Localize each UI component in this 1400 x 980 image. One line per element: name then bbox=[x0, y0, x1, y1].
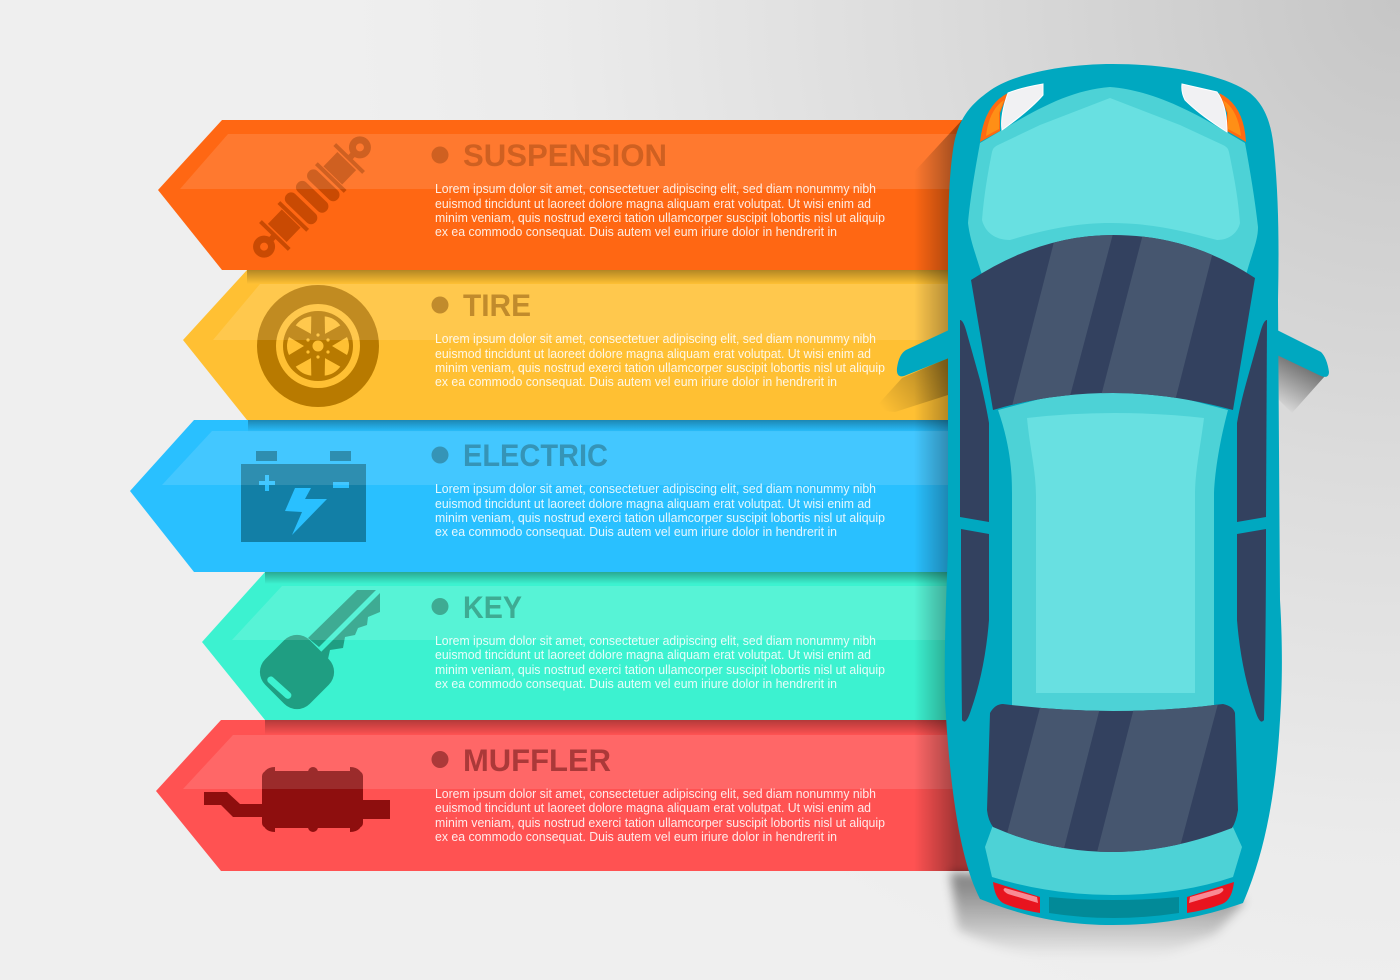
trunk bbox=[985, 825, 1242, 895]
suspension band bbox=[158, 120, 965, 270]
muffler band bbox=[156, 720, 970, 871]
band highlight bbox=[162, 431, 965, 485]
car shadow on ground bbox=[950, 872, 1246, 961]
muffler text: euismod tincidunt ut laoreet dolore magna aliquam erat volutpat. Ut wisi enim ad bbox=[435, 801, 871, 815]
key text: ex ea commodo consequat. Duis autem vel eum iriure dolor in hendrerit in bbox=[435, 677, 837, 691]
rear window bbox=[987, 700, 1238, 860]
side windows right bbox=[1237, 320, 1267, 722]
rear plate panel bbox=[1049, 897, 1179, 918]
car body bbox=[945, 64, 1282, 925]
key band bbox=[202, 572, 965, 720]
roof bbox=[998, 380, 1228, 712]
suspension text: euismod tincidunt ut laoreet dolore magna aliquam erat volutpat. Ut wisi enim ad bbox=[435, 197, 871, 211]
suspension heading: SUSPENSION bbox=[463, 137, 667, 173]
tail light left bbox=[993, 882, 1040, 913]
band highlight bbox=[183, 735, 970, 789]
tire heading: TIRE bbox=[463, 287, 531, 323]
electric text: euismod tincidunt ut laoreet dolore magna aliquam erat volutpat. Ut wisi enim ad bbox=[435, 497, 871, 511]
band highlight bbox=[232, 586, 965, 640]
icon: shock absorber bbox=[242, 126, 382, 268]
electric band bbox=[130, 420, 965, 572]
hood bbox=[968, 87, 1258, 275]
side mirror left bbox=[897, 330, 949, 376]
roof panel bbox=[1027, 413, 1204, 693]
band top shadow bbox=[265, 720, 970, 735]
icon: tire bbox=[257, 285, 379, 407]
key text: minim veniam, quis nostrud exerci tation ullamcorper suscipit lobortis nisl ut aliquip bbox=[435, 663, 885, 677]
tail light right bbox=[1187, 882, 1234, 913]
muffler text: minim veniam, quis nostrud exerci tation ullamcorper suscipit lobortis nisl ut aliquip bbox=[435, 816, 885, 830]
band highlight bbox=[213, 284, 965, 340]
side mirror right bbox=[1277, 330, 1329, 377]
car bbox=[897, 64, 1329, 925]
tire text: euismod tincidunt ut laoreet dolore magna aliquam erat volutpat. Ut wisi enim ad bbox=[435, 347, 871, 361]
muffler heading: MUFFLER bbox=[463, 742, 611, 778]
icon: muffler bbox=[204, 767, 390, 832]
mirror shadow left bbox=[873, 358, 948, 412]
side windows left bbox=[960, 320, 989, 722]
tire text: ex ea commodo consequat. Duis autem vel eum iriure dolor in hendrerit in bbox=[435, 375, 837, 389]
panel: suspension bbox=[158, 120, 965, 270]
tire text: Lorem ipsum dolor sit amet, consectetuer adipiscing elit, sed diam nonummy nibh bbox=[435, 332, 876, 346]
car shadow on bands bbox=[914, 120, 970, 871]
electric text: minim veniam, quis nostrud exerci tation ullamcorper suscipit lobortis nisl ut aliquip bbox=[435, 511, 885, 525]
key heading bbox=[432, 589, 522, 625]
mirror shadow right bbox=[1277, 350, 1325, 413]
tire heading bbox=[432, 287, 531, 323]
electric text: Lorem ipsum dolor sit amet, consectetuer adipiscing elit, sed diam nonummy nibh bbox=[435, 482, 876, 496]
hood panel bbox=[982, 98, 1240, 240]
key heading: KEY bbox=[463, 589, 522, 625]
suspension text: minim veniam, quis nostrud exerci tation ullamcorper suscipit lobortis nisl ut aliquip bbox=[435, 211, 885, 225]
headlight left bbox=[980, 84, 1043, 142]
panel: key bbox=[202, 572, 965, 720]
band top shadow bbox=[247, 270, 965, 284]
tire text: minim veniam, quis nostrud exerci tation ullamcorper suscipit lobortis nisl ut aliquip bbox=[435, 361, 885, 375]
icon: key bbox=[252, 590, 380, 717]
suspension text: Lorem ipsum dolor sit amet, consectetuer adipiscing elit, sed diam nonummy nibh bbox=[435, 182, 876, 196]
key text: Lorem ipsum dolor sit amet, consectetuer adipiscing elit, sed diam nonummy nibh bbox=[435, 634, 876, 648]
headlight right bbox=[1182, 84, 1246, 142]
panel: muffler bbox=[156, 720, 970, 871]
panel: tire bbox=[183, 270, 965, 420]
band top shadow bbox=[265, 572, 965, 584]
suspension text: ex ea commodo consequat. Duis autem vel eum iriure dolor in hendrerit in bbox=[435, 225, 837, 239]
icon: battery bbox=[241, 451, 366, 542]
panel: electric bbox=[130, 420, 965, 572]
electric text: ex ea commodo consequat. Duis autem vel eum iriure dolor in hendrerit in bbox=[435, 525, 837, 539]
muffler text: Lorem ipsum dolor sit amet, consectetuer adipiscing elit, sed diam nonummy nibh bbox=[435, 787, 876, 801]
band top shadow bbox=[248, 420, 965, 432]
key text: euismod tincidunt ut laoreet dolore magna aliquam erat volutpat. Ut wisi enim ad bbox=[435, 648, 871, 662]
windshield bbox=[971, 230, 1255, 410]
tire band bbox=[183, 270, 965, 420]
electric heading: ELECTRIC bbox=[463, 437, 608, 473]
band highlight bbox=[180, 134, 965, 189]
muffler text: ex ea commodo consequat. Duis autem vel eum iriure dolor in hendrerit in bbox=[435, 830, 837, 844]
